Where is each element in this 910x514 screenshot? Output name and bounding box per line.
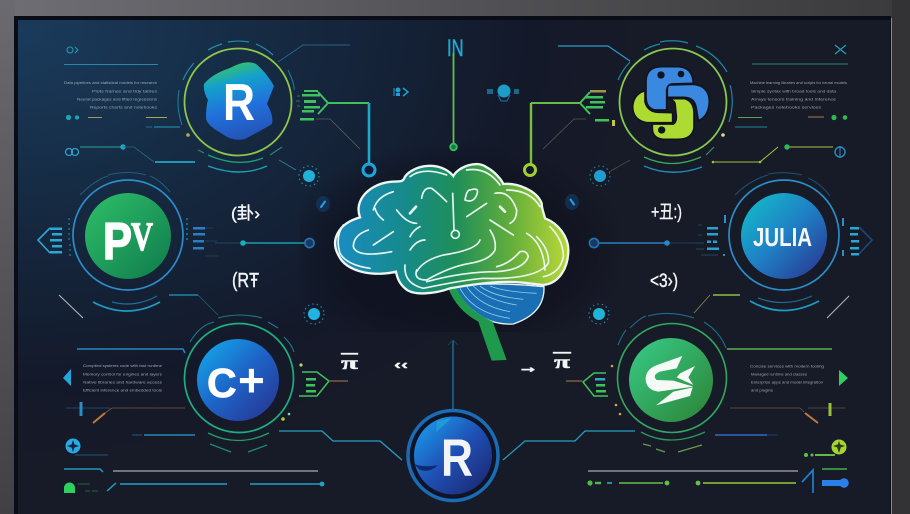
connector to brain [524, 46, 630, 176]
text block: Compiled systems code with fast runtime [83, 364, 162, 368]
text block: Efficient inference and embedded tools [83, 388, 162, 392]
bottom R logo [408, 410, 498, 500]
text block: Reports charts and notebooks [90, 106, 157, 110]
floating symbols: (RŦ [232, 270, 259, 292]
text block: Managed runtime and classes [751, 372, 807, 376]
connector to brain [589, 238, 695, 248]
logo letters: P [103, 213, 132, 271]
globes near brain base [304, 304, 609, 324]
icon: R blob logo: R [223, 74, 255, 132]
panel: R language top left [64, 41, 408, 186]
link to bottom logo [279, 431, 402, 460]
vertical connector to bottom logo [448, 340, 458, 409]
panel: Julia right [589, 173, 872, 318]
panel: PV left [38, 172, 314, 318]
glowing markers [316, 194, 579, 212]
text block: Simple syntax with broad tools and data [751, 90, 837, 94]
text block: Enterprise apps and model integration [751, 380, 823, 384]
panel: green logo lower right [503, 313, 849, 493]
brain stem [448, 288, 507, 361]
floating symbols: → [518, 359, 538, 376]
icon: R blob logo [204, 62, 274, 140]
connector to brain [215, 238, 314, 248]
ring [184, 315, 294, 452]
logo symbol [646, 356, 695, 405]
icon: green chip [296, 90, 328, 120]
icon: globe [299, 166, 319, 186]
logo letters [103, 213, 153, 271]
logo letters: + [238, 354, 265, 406]
icon: left triangle [63, 369, 71, 386]
icon: left chevron chip [38, 218, 70, 256]
icon: small processor [487, 84, 519, 101]
connector to brain [278, 45, 375, 176]
icon: green chip [580, 90, 615, 126]
ring [178, 41, 294, 172]
link to bottom logo [503, 431, 635, 460]
cerebellum [453, 284, 544, 324]
text block: Packages notebooks services [751, 106, 821, 110]
ring [73, 172, 183, 311]
text block [750, 81, 847, 110]
text block [83, 364, 162, 392]
floating symbols: <3›) [650, 271, 678, 292]
text block: Arrays tensors training and inference [751, 98, 836, 102]
icon: green chip [566, 365, 621, 415]
ring [618, 41, 732, 172]
logo text: JULIA [753, 222, 812, 252]
links below [694, 295, 849, 318]
icon: left bars [695, 215, 725, 256]
logo disc [197, 339, 279, 421]
brain illustration [335, 164, 568, 361]
logo letters [207, 354, 265, 406]
floating symbols: π [341, 353, 358, 373]
floating symbols: π [554, 352, 570, 372]
logo letters: V [131, 214, 153, 259]
links below [59, 295, 218, 318]
text block: Memory control for engines and layers [83, 372, 162, 376]
decorative rules and icons [712, 45, 848, 163]
floating symbols: (卦› [231, 204, 260, 223]
ring [729, 173, 839, 310]
rules and icons [587, 349, 849, 493]
icon: Python logo [633, 67, 709, 139]
logo disc [85, 193, 171, 279]
text block: Plots frames and tidy tables [92, 90, 157, 94]
icon: globe [590, 166, 610, 186]
panel: Python top right [186, 41, 848, 186]
top centre heading [447, 35, 464, 150]
floating symbols: ‹‹ [394, 357, 408, 372]
logo disc [741, 193, 827, 279]
decorative rules and icons [64, 47, 195, 162]
ring [618, 313, 726, 452]
floating symbols: +丑:) [651, 202, 682, 222]
floating symbols [231, 202, 682, 376]
text block: Data pipelines and statistical models for research [64, 81, 157, 85]
dot accents [186, 133, 725, 137]
bottom R logo: R [441, 429, 473, 488]
icon: right bars [187, 218, 219, 256]
icon: green chip [281, 363, 348, 421]
text block: Machine learning libraries and scripts for neural models [750, 81, 847, 85]
rules and icons [64, 349, 324, 493]
text block: Neural packages and fitted regressions [77, 98, 157, 102]
logo letters: C [207, 360, 237, 406]
icon: right chevron chip [843, 218, 872, 256]
top centre heading: IN [447, 35, 464, 62]
text block: Concise services with modern tooling [750, 364, 824, 368]
logo disc [629, 338, 713, 422]
icon: small shield [393, 88, 408, 96]
text block: and plugins [751, 388, 773, 392]
text block: Native libraries and hardware access [83, 380, 162, 384]
brain hemispheres [335, 164, 568, 293]
text block [750, 364, 824, 392]
text block [64, 81, 157, 110]
panel: C+ lower left [63, 315, 402, 493]
